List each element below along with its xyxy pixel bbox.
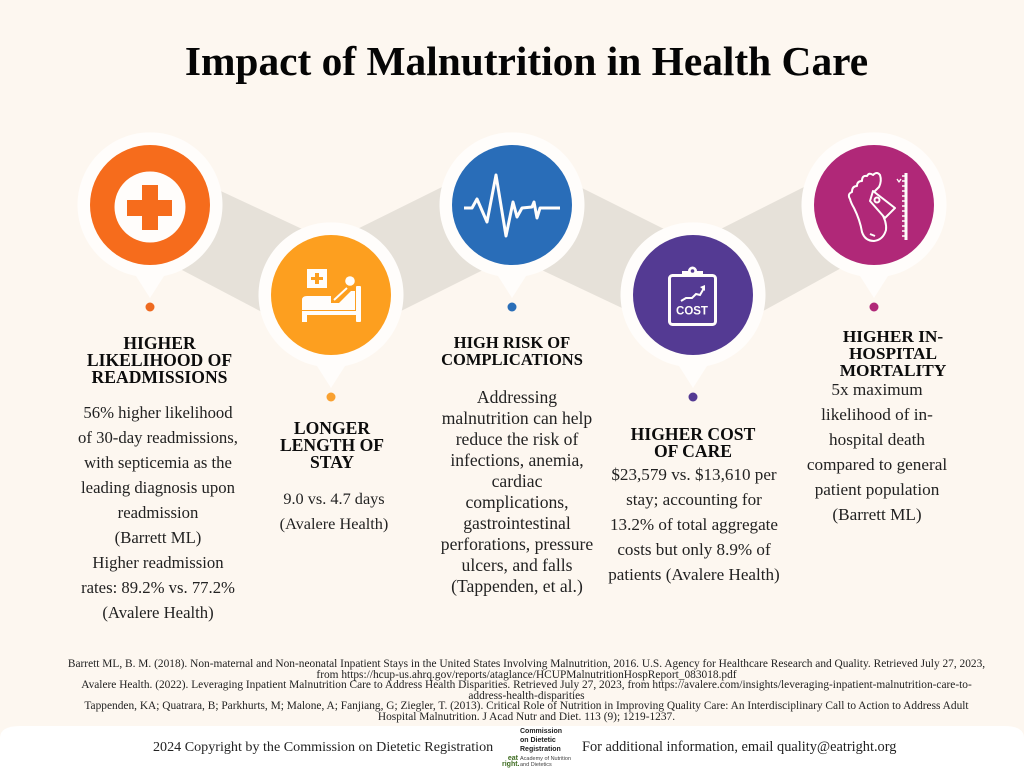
pin: length of stay — [258, 222, 404, 402]
copyright note: 2024 Copyright by the Commission on Dietetic Registration — [153, 739, 493, 755]
zigzag connecting band — [150, 152, 874, 346]
references — [68, 658, 985, 723]
column 4 body: 13.2% of total aggregate — [610, 515, 778, 534]
column 1 body: readmission — [118, 503, 198, 522]
column 1 heading: LIKELIHOOD OF — [87, 350, 232, 370]
column 5 heading — [840, 327, 946, 380]
column 1 body: rates: 89.2% vs. 77.2% — [81, 578, 235, 597]
column 1 body: 56% higher likelihood — [83, 403, 233, 422]
logo: Commission on Dietetic Registration — [502, 728, 571, 768]
column 4 body: patients (Avalere Health) — [608, 565, 780, 584]
column 3 body: malnutrition can help — [442, 408, 592, 428]
column 5 body: likelihood of in- — [821, 405, 933, 424]
column 5 body: hospital death — [829, 430, 925, 449]
column 2 heading: LONGER — [294, 418, 370, 438]
column 3 body: ulcers, and falls — [462, 555, 572, 575]
column 5 heading: HOSPITAL — [849, 344, 937, 363]
logo: Commission on Dietetic Registration: eat — [508, 755, 518, 762]
column 3 heading: HIGH RISK OF — [454, 333, 570, 352]
column 2 heading: STAY — [310, 452, 354, 472]
references: address-health-disparities — [468, 690, 585, 702]
column 1 body — [78, 403, 238, 622]
logo: Commission on Dietetic Registration: Registration — [520, 746, 561, 753]
column 4 heading — [630, 424, 756, 461]
references: Barrett ML, B. M. (2018). Non-maternal and Non-neonatal Inpatient Stays in the United States Involving Malnutrition, 2016. U.S. Agency for Healthcare Research and Quality. Retrieved July 27, 2023, — [68, 658, 985, 670]
column 1 heading — [87, 333, 232, 387]
column 3 body — [441, 387, 593, 596]
column 5 body: patient population — [815, 480, 939, 499]
column 1 heading: HIGHER — [123, 333, 196, 353]
icon: cost clipboard — [670, 266, 716, 324]
column 2 body: (Avalere Health) — [280, 514, 388, 533]
icon: cost clipboard: COST — [676, 306, 708, 318]
column 1 body: with septicemia as the — [84, 453, 232, 472]
icon: patient in hospital bed — [302, 269, 361, 322]
column 3 body: reduce the risk of — [456, 429, 578, 449]
column 1 body: of 30-day readmissions, — [78, 428, 238, 447]
column 2 heading: LENGTH OF — [280, 435, 384, 455]
column 5 body — [807, 380, 947, 524]
references: from https://hcup-us.ahrq.gov/reports/ataglance/HCUPMalnutritionHospReport_083018.pdf — [316, 669, 737, 681]
column 2 body — [280, 489, 388, 533]
column 3 body: complications, — [465, 492, 569, 512]
contact note: For additional information, email quality@eatright.org — [582, 739, 896, 755]
logo: Commission on Dietetic Registration: Commission — [520, 728, 562, 735]
pin: cost of care — [620, 222, 766, 402]
pin: readmissions — [77, 132, 223, 312]
column 3 body: perforations, pressure — [441, 534, 593, 554]
column 4 body: $23,579 vs. $13,610 per — [611, 465, 777, 484]
column 3 body: Addressing — [477, 387, 557, 407]
column 1 body: Higher readmission — [92, 553, 224, 572]
references: Tappenden, KA; Quatrara, B; Parkhurts, M; Malone, A; Fanjiang, G; Ziegler, T. (2013). Critical Role of Nutrition in Improving Quality Care: An Interdisciplinary Call to Action to Address Adult — [84, 700, 969, 712]
column 5 body: (Barrett ML) — [832, 505, 922, 524]
column 5 heading: MORTALITY — [840, 361, 946, 380]
column 1 heading: READMISSIONS — [92, 367, 227, 387]
pin: mortality — [802, 132, 946, 312]
icon: heartbeat line — [464, 175, 560, 236]
column 4 body: stay; accounting for — [626, 490, 762, 509]
column 5 body: 5x maximum — [831, 380, 923, 399]
column 1 body: (Barrett ML) — [115, 528, 201, 547]
column 3 heading — [441, 333, 583, 369]
logo: Commission on Dietetic Registration: right. — [502, 761, 520, 768]
column 4 body: costs but only 8.9% of — [617, 540, 771, 559]
column 3 body: gastrointestinal — [463, 513, 571, 533]
column 3 body: infections, anemia, — [450, 450, 584, 470]
title: Impact of Malnutrition in Health Care — [185, 38, 868, 84]
column 2 body: 9.0 vs. 4.7 days — [283, 489, 385, 508]
column 3 body: (Tappenden, et al.) — [451, 576, 583, 596]
column 1 body: (Avalere Health) — [102, 603, 214, 622]
column 5 body: compared to general — [807, 455, 947, 474]
column 4 body — [608, 465, 780, 584]
column 3 body: cardiac — [492, 471, 542, 491]
footer band — [0, 726, 1024, 768]
icon: medical cross — [114, 172, 186, 242]
column 4 heading: OF CARE — [654, 441, 732, 461]
logo: Commission on Dietetic Registration: Academy of Nutrition — [520, 756, 571, 762]
column 4 heading: HIGHER COST — [631, 424, 755, 444]
column 1 body: leading diagnosis upon — [81, 478, 235, 497]
pin: complications — [440, 132, 584, 312]
column 2 heading — [280, 418, 384, 472]
column 5 heading: HIGHER IN- — [843, 327, 943, 346]
references: Hospital Malnutrition. J Acad Nutr and Diet. 113 (9); 1219-1237. — [378, 711, 675, 723]
column 3 heading: COMPLICATIONS — [441, 350, 583, 369]
logo: Commission on Dietetic Registration: and Dietetics — [520, 762, 552, 768]
icon: foot with toe tag and ruler — [849, 173, 906, 241]
logo: Commission on Dietetic Registration: on Dietetic — [520, 737, 556, 744]
references: Avalere Health. (2022). Leveraging Inpatient Malnutrition Care to Address Health Disparities. Retrieved July 27, 2023, from https://avalere.com/insights/leveraging-inpatient-malnutrition-care-to- — [81, 679, 972, 691]
